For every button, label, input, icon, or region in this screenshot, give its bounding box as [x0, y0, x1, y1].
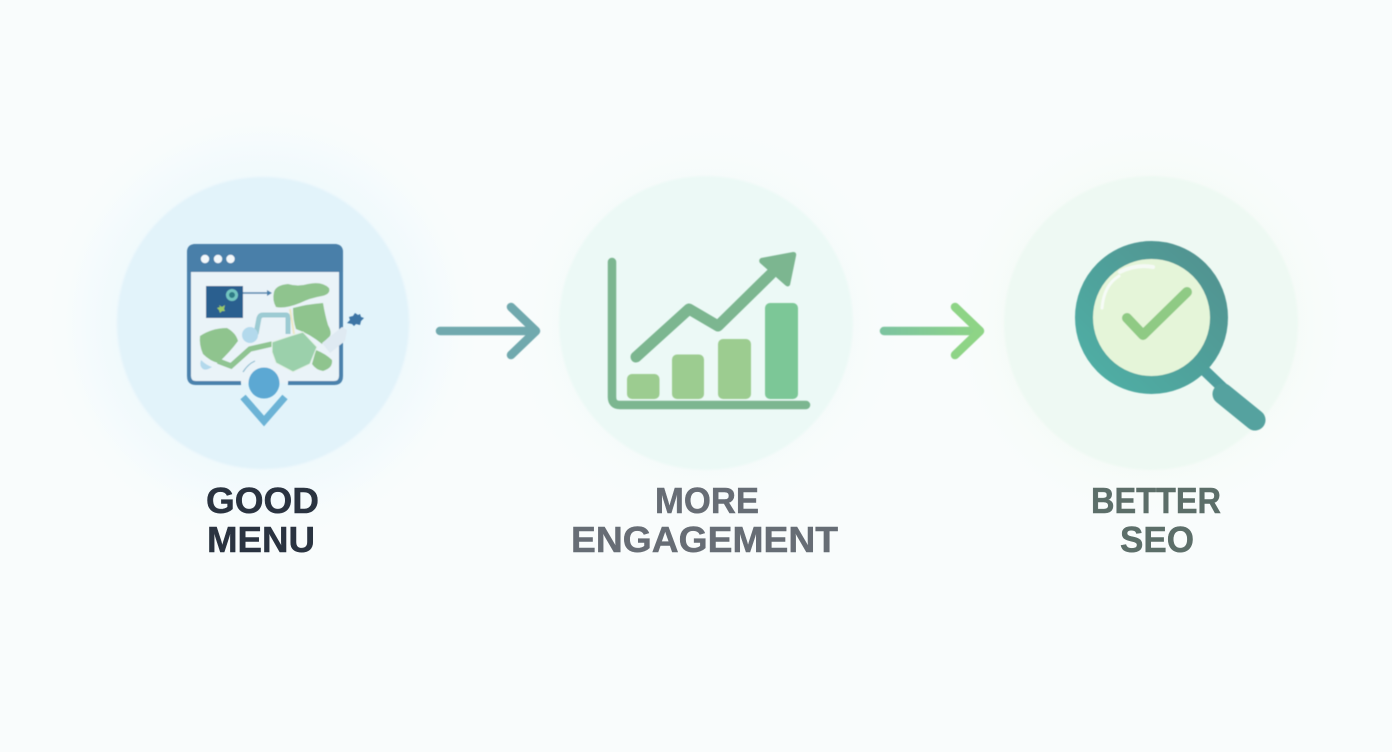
icon: growth chart [612, 252, 806, 405]
lens [1092, 258, 1210, 376]
bars [627, 303, 798, 399]
label: more engagement: MORE [655, 480, 759, 521]
label: good menu [206, 480, 319, 560]
icon: magnifying glass with check [1084, 250, 1255, 420]
arrow: engagement to seo [884, 307, 980, 355]
handle [1203, 369, 1226, 391]
map landmasses [200, 283, 332, 372]
icon: location pin [243, 361, 285, 421]
label: more engagement: ENGAGEMENT [571, 519, 838, 560]
road lines [218, 309, 294, 366]
arrow: menu to engagement [440, 307, 536, 355]
lens highlight [1102, 276, 1119, 308]
check mark [1127, 292, 1187, 335]
background glows [38, 98, 1361, 548]
axes [612, 262, 806, 405]
trend arrow [636, 274, 771, 357]
label: good menu: GOOD [206, 480, 319, 521]
tool: brush at right edge [322, 313, 364, 353]
label: more engagement [571, 480, 838, 560]
panel: more engagement circle [559, 176, 853, 470]
label: better seo [1091, 480, 1221, 560]
label: good menu: MENU [207, 519, 315, 560]
window title bar [187, 244, 343, 272]
window dots [201, 255, 235, 263]
window frame [189, 246, 341, 383]
label: better seo: SEO [1120, 519, 1194, 560]
dark map panel [206, 286, 272, 318]
icon: browser window with site map [187, 244, 364, 421]
label: better seo: BETTER [1091, 480, 1221, 521]
panel: good menu circle [117, 177, 409, 469]
panel: better seo circle [1004, 176, 1298, 470]
